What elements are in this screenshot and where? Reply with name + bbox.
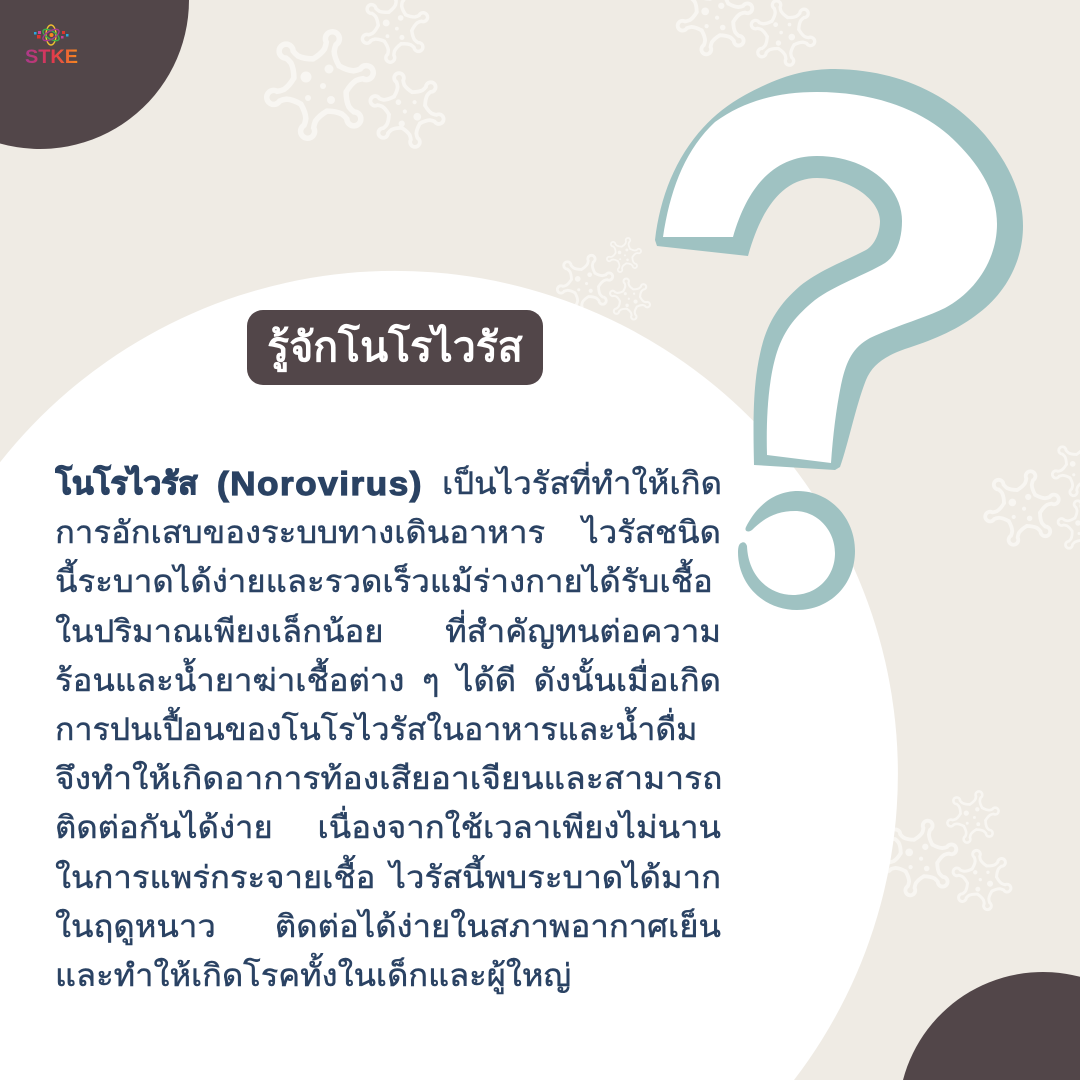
body paragraph: และทำให้เกิดโรคทั้งในเด็กและผู้ใหญ่ [55, 958, 571, 993]
question mark dot ring [738, 491, 855, 610]
logo [25, 25, 78, 68]
body paragraph: นี้ระบาดได้ง่ายและรวดเร็วแม้ร่างกายได้รับเชื้อ [55, 564, 713, 599]
question mark [655, 69, 1023, 610]
body paragraph: ในปริมาณเพียงเล็กน้อย ที่สำคัญทนต่อความ [55, 614, 721, 649]
body paragraph: ติดต่อกันได้ง่าย เนื่องจากใช้เวลาเพียงไม่นาน [55, 810, 721, 845]
body paragraph [55, 462, 721, 994]
question mark white fill [663, 92, 997, 463]
heading badge [247, 310, 543, 385]
body paragraph: จึงทำให้เกิดอาการท้องเสียอาเจียนและสามารถ [55, 761, 721, 796]
virus cluster: top centre [253, 0, 460, 163]
body paragraph: การอักเสบของระบบทางเดินอาหาร ไวรัสชนิด [55, 515, 721, 550]
body paragraph: ในการแพร่กระจายเชื้อ ไวรัสนี้พบระบาดได้มาก [55, 860, 721, 895]
white circle panel [0, 271, 898, 1080]
virus cluster: top right [668, 0, 829, 79]
virus cluster: right [976, 433, 1080, 559]
logo: STKE [25, 46, 78, 68]
body paragraph: โนโรไวรัส [55, 466, 198, 501]
body paragraph: ร้อนและน้ำยาฆ่าเชื้อต่าง ๆ ได้ดี ดังนั้นเมื่อเกิด [55, 663, 721, 698]
body paragraph: (Norovirus) [217, 465, 423, 502]
question mark hook outline [655, 69, 1023, 470]
body paragraph: การปนเปื้อนของโนโรไวรัสในอาหารและน้ำดื่ม [55, 712, 697, 747]
virus cluster: bottom right [872, 785, 1024, 922]
dark corner circle: bottom right [903, 972, 1080, 1080]
body paragraph: ในฤดูหนาว ติดต่อได้ง่ายในสภาพอากาศเย็น [55, 909, 721, 944]
heading badge: รู้จักโนโรไวรัส [267, 324, 523, 370]
body paragraph: เป็นไวรัสที่ทำให้เกิด [442, 466, 721, 501]
virus cluster: middle [550, 234, 659, 328]
dark corner circle: top left [0, 0, 189, 149]
